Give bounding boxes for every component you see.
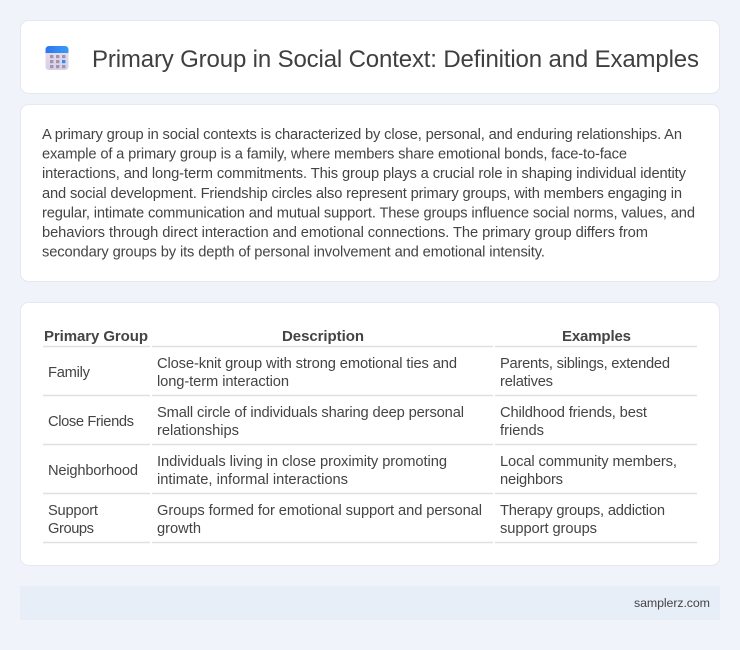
table header row: Examples — [562, 328, 631, 345]
row: neighborhood: Individuals living in close proximity promoting — [157, 454, 447, 470]
row: family: relatives — [500, 374, 553, 390]
panel: summary paragraph: example of a primary group is a family, where members share emotional bonds, face-to-face — [42, 147, 627, 163]
row: support groups — [48, 503, 665, 537]
panel: primary group table — [20, 302, 720, 566]
row: neighborhood: neighbors — [500, 472, 563, 488]
table header row: Description — [282, 328, 364, 345]
panel: summary paragraph: A primary group in social contexts is characterized by close, personal, and enduring relationships. An — [42, 127, 682, 143]
row: family: Family — [48, 365, 91, 381]
row: close friends: Close Friends — [48, 414, 134, 430]
row: support groups: support groups — [500, 521, 597, 537]
table header row: Primary Group — [44, 328, 148, 345]
row: support groups: Groups formed for emotional support and personal — [157, 503, 482, 519]
row: family: Close-knit group with strong emotional ties and — [157, 356, 457, 372]
footer — [20, 586, 720, 620]
row: neighborhood: intimate, informal interactions — [157, 472, 348, 488]
row: neighborhood — [48, 454, 677, 488]
row: close friends: Small circle of individuals sharing deep personal — [157, 405, 464, 421]
row: close friends: relationships — [157, 423, 239, 439]
panel: summary paragraph: behaviors through direct interaction and emotional connections. The primary group differs from — [42, 225, 648, 241]
panel: summary paragraph: interactions, and long-term commitments. This group plays a crucial role in shaping individual identity — [42, 166, 687, 182]
row: close friends — [48, 405, 647, 439]
row: close friends: Childhood friends, best — [500, 405, 647, 421]
row: support groups: Therapy groups, addiction — [500, 503, 665, 519]
icon: calendar — [46, 46, 68, 70]
panel: summary paragraph: and social development. Friendship circles also represent primary groups, with members engaging in — [42, 186, 682, 202]
panel: summary paragraph: regular, intimate communication and mutual support. These groups influence social norms, values, and — [42, 205, 695, 221]
table header row — [44, 328, 631, 345]
row: family — [48, 356, 670, 390]
row: close friends: friends — [500, 423, 544, 439]
row: neighborhood: Local community members, — [500, 454, 677, 470]
row: support groups: Support — [48, 503, 98, 519]
footer: samplerz.com — [634, 596, 710, 610]
row: support groups: Groups — [48, 521, 94, 537]
row: neighborhood: Neighborhood — [48, 463, 138, 479]
row: support groups: growth — [157, 521, 201, 537]
title: Primary Group in Social Context: Definition and Examples — [92, 46, 699, 73]
panel: summary paragraph: secondary groups by its depth of personal involvement and emotional intensity. — [42, 245, 545, 261]
header panel — [20, 20, 720, 94]
panel: summary paragraph — [20, 104, 720, 282]
row: family: Parents, siblings, extended — [500, 356, 670, 372]
row: family: long-term interaction — [157, 374, 289, 390]
